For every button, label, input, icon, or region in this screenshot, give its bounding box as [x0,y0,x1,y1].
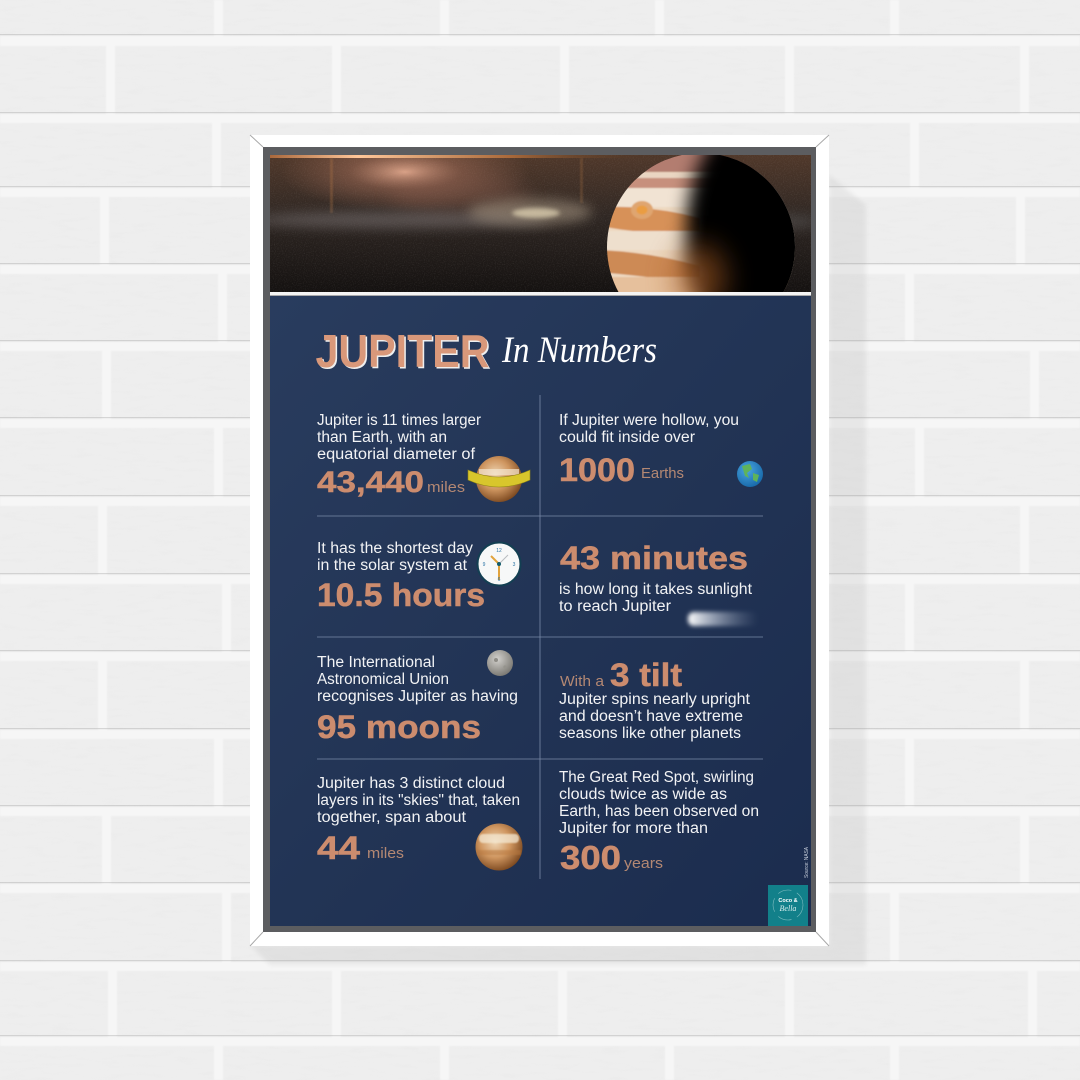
fact: cloud layers: 44 [317,830,360,866]
fact: great red spot: The Great Red Spot, swirling [559,769,754,786]
fact: shortest day: It has the shortest day [317,540,473,557]
icon: Earth [737,461,763,487]
fact: sunlight: 43 minutes [560,540,748,576]
fact: sunlight: is how long it takes sunlight [559,581,753,598]
fact: diameter: equatorial diameter of [317,446,476,463]
night side of Jupiter [671,155,795,292]
fact: sunlight: to reach Jupiter [559,598,671,615]
fact: great red spot [559,769,759,876]
fact: tilt: seasons like other planets [559,725,741,742]
fact: cloud layers: miles [367,845,404,862]
source note: Source: NASA [804,846,810,878]
fact: hollow [559,412,739,488]
logo badge: Coco & [778,898,798,904]
fact: tilt: With a [560,673,605,690]
fact: tilt: Jupiter spins nearly upright [559,691,751,708]
fact: diameter: miles [427,479,465,496]
title: JUPITER [317,326,491,378]
icon: Jupiter with measuring tape [468,456,530,502]
title: JUPITER [316,325,490,377]
icon: Jupiter [476,824,522,870]
fact: diameter: 43,440 [317,466,424,499]
fact: moons: 95 moons [317,709,481,745]
fact: shortest day: in the solar system at [317,557,468,574]
logo badge: Bella [780,904,796,913]
title [316,325,657,378]
icon: clock [478,542,520,586]
icon: beam of sunlight [688,612,758,626]
fact: shortest day [317,540,485,613]
icon: moon [487,650,513,676]
white frame [250,135,829,946]
fact: moons: recognises Jupiter as having [317,688,518,705]
icon: clock: 9 [483,562,486,568]
fact: hollow: could fit inside over [559,429,695,446]
grid dividers [317,395,763,879]
frame shadow on wall [250,175,866,965]
logo badge [768,885,808,926]
fact: diameter: Jupiter is 11 times larger [317,412,481,429]
fact: hollow: Earths [641,465,684,482]
icon: clock: 3 [513,562,516,568]
fact: great red spot: 300 [560,839,621,876]
fact: cloud layers: Jupiter has 3 distinct cloud [317,775,505,792]
title: In Numbers [501,330,657,371]
fact: moons: The International [317,654,435,671]
fact: great red spot: clouds twice as wide as [559,786,727,803]
fact: great red spot: Jupiter for more than [559,820,708,837]
fact: tilt: and doesn’t have extreme [559,708,743,725]
fact: tilt: 3 tilt [610,657,682,693]
sun flare [292,158,518,208]
fact: diameter [317,412,481,499]
icon: clock: 12 [496,548,502,554]
fact: great red spot: Earth, has been observed on [559,803,759,820]
fact: diameter: than Earth, with an [317,429,447,446]
icon: clock: 6 [498,577,501,583]
fact: great red spot: years [624,855,663,872]
fact: shortest day: 10.5 hours [317,577,485,613]
white divider band [270,292,811,296]
Jupiter planet [607,155,793,274]
fact: cloud layers [317,775,520,866]
fact: cloud layers: together, span about [317,809,467,826]
fact: moons: Astronomical Union [317,671,449,688]
milky way band [250,212,550,228]
fact: tilt [559,657,751,742]
fact: hollow: If Jupiter were hollow, you [559,412,739,429]
poster navy panel [270,296,811,926]
fact: cloud layers: layers in its "skies" that, taken [317,792,520,809]
fact: hollow: 1000 [559,452,635,488]
poster header: space image with Jupiter [270,155,811,292]
fact: moons [317,654,518,745]
fact: sunlight [559,540,753,615]
